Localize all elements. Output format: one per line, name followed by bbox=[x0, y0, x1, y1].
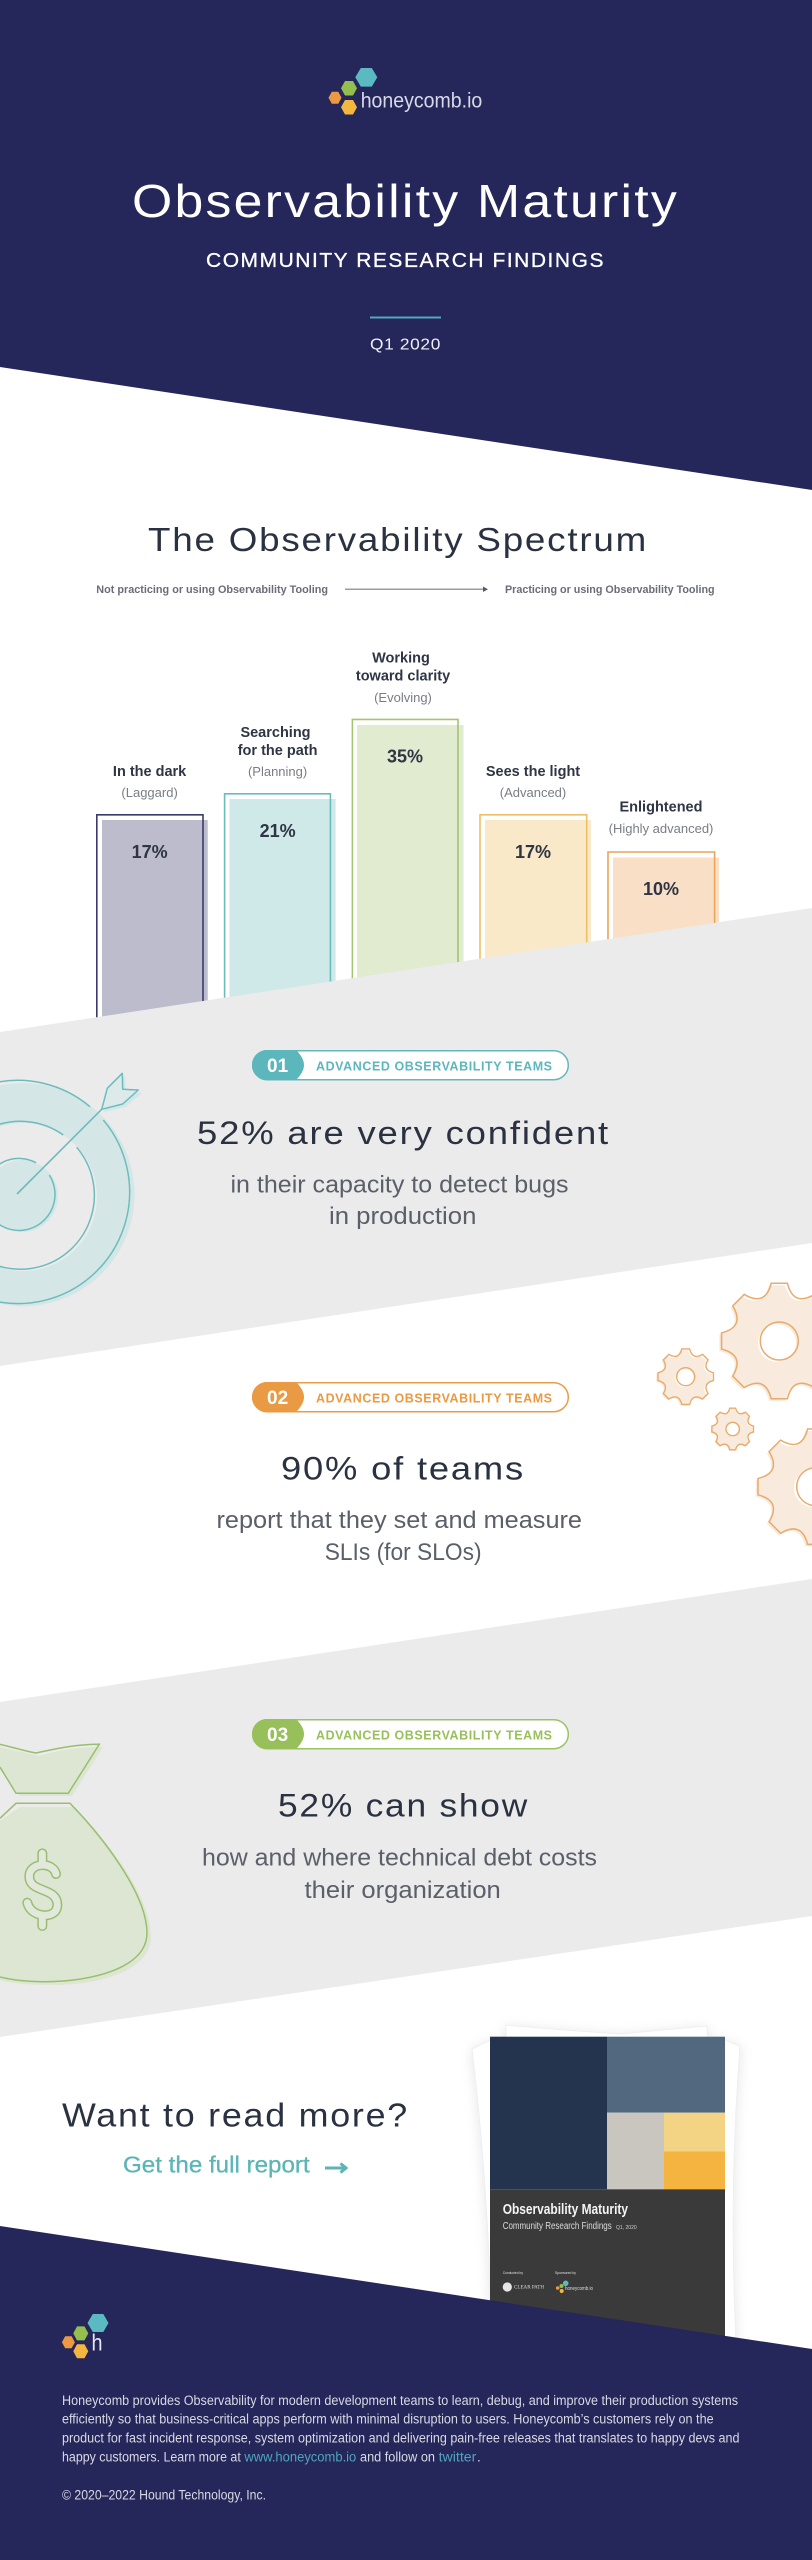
report cover bbox=[472, 2025, 740, 2360]
finding 02 pill badge bbox=[252, 1382, 568, 1412]
finding 03 heading: 52% can show bbox=[278, 1788, 529, 1824]
subtitle: COMMUNITY RESEARCH FINDINGS bbox=[206, 249, 605, 272]
bar: enlightened 10%: (Highly advanced) bbox=[609, 821, 713, 836]
footer logo: h bbox=[92, 2330, 102, 2356]
finding 03 pill badge: 03 bbox=[267, 1725, 288, 1746]
report cover: Community Research Findings bbox=[503, 2221, 612, 2232]
report cover: Q1, 2020 bbox=[616, 2225, 637, 2231]
panel: footer background bbox=[0, 2226, 812, 2560]
bar: enlightened 10%: 10% bbox=[643, 879, 679, 899]
bar: in the dark 17%: 17% bbox=[132, 842, 168, 862]
footer description: efficiently so that business-critical apps perform with minimal disruption to users. Honeycomb’s customers rely on the bbox=[62, 2412, 714, 2427]
footer description: . bbox=[477, 2450, 481, 2464]
finding 02 text: SLIs (for SLOs) bbox=[325, 1539, 482, 1566]
large gear bottom bbox=[756, 1429, 812, 1546]
panel: finding 03 background bbox=[0, 1579, 812, 2037]
bar: working toward clarity 35%: (Evolving) bbox=[374, 690, 432, 705]
footer description: twitter bbox=[439, 2450, 477, 2464]
finding 02 heading: 90% of teams bbox=[281, 1450, 525, 1486]
finding 01 text: in their capacity to detect bugs bbox=[230, 1172, 568, 1199]
cover text: Observability Maturity bbox=[503, 2202, 628, 2218]
small honeycomb logo: honeycomb.io bbox=[565, 2286, 593, 2292]
footer description: happy customers. Learn more at bbox=[62, 2450, 241, 2464]
date rule bbox=[370, 316, 441, 318]
spectrum legend: Practicing or using Observability Tooling bbox=[505, 584, 715, 596]
spectrum legend: Not practicing or using Observability Tooling bbox=[96, 584, 328, 596]
bar: sees the light 17%: (Advanced) bbox=[500, 785, 566, 800]
bar: enlightened 10%: Enlightened bbox=[620, 800, 702, 816]
finding 01 pill badge: ADVANCED OBSERVABILITY TEAMS bbox=[316, 1060, 553, 1074]
large gear top bbox=[719, 1283, 812, 1401]
bar: sees the light 17%: 17% bbox=[515, 842, 551, 862]
title: Observability Maturity bbox=[132, 175, 679, 227]
bar: working toward clarity 35%: 35% bbox=[387, 746, 423, 766]
bar: in the dark 17%: (Laggard) bbox=[121, 785, 178, 800]
header logo: honeycomb.io bbox=[361, 89, 482, 112]
report cover: Sponsored by bbox=[555, 2271, 576, 2275]
finding 02 pill badge: ADVANCED OBSERVABILITY TEAMS bbox=[316, 1392, 553, 1406]
small honeycomb logo bbox=[556, 2280, 593, 2293]
footer description: Honeycomb provides Observability for modern development teams to learn, debug, and improve their production systems bbox=[62, 2393, 738, 2408]
spectrum heading: The Observability Spectrum bbox=[148, 521, 648, 558]
bar: working toward clarity 35%: Working bbox=[372, 650, 430, 666]
panel: finding 01 background bbox=[0, 908, 812, 1366]
finding 02 text: report that they set and measure bbox=[216, 1507, 582, 1534]
bar: working toward clarity 35%: toward clarity bbox=[356, 668, 450, 684]
bar: sees the light 17% bbox=[480, 764, 591, 1020]
bar: enlightened 10% bbox=[608, 800, 719, 1008]
bar: sees the light 17%: Sees the light bbox=[486, 764, 580, 780]
finding 03 text bbox=[202, 1845, 597, 1904]
date: Q1 2020 bbox=[370, 336, 441, 354]
finding 01 pill badge bbox=[252, 1050, 568, 1080]
finding 01 text: in production bbox=[329, 1203, 476, 1230]
icon: gears bbox=[656, 1283, 812, 1546]
spectrum legend bbox=[96, 584, 715, 596]
panel: header background bbox=[0, 0, 812, 490]
bar: searching for the path 21%: 21% bbox=[260, 821, 296, 841]
finding 01 pill badge: 01 bbox=[267, 1056, 289, 1077]
bar: searching for the path 21% bbox=[225, 725, 336, 1040]
footer description: product for fast incident response, system optimization and delivering pain-free releases that translates to happy devs and bbox=[62, 2430, 740, 2446]
footer description bbox=[62, 2393, 740, 2464]
small gear middle bbox=[711, 1408, 753, 1451]
report cover: Conducted by bbox=[503, 2271, 523, 2275]
bar: in the dark 17% bbox=[97, 764, 208, 1050]
bar: in the dark 17%: In the dark bbox=[113, 764, 187, 780]
footer logo bbox=[62, 2314, 108, 2358]
icon: target and arrow bbox=[0, 1073, 142, 1306]
bar: searching for the path 21%: Searching bbox=[240, 725, 311, 741]
arrow bbox=[325, 2164, 346, 2172]
bar chart bbox=[97, 650, 719, 1050]
bar: searching for the path 21%: for the path bbox=[238, 743, 317, 759]
finding 01 text bbox=[230, 1172, 568, 1230]
finding 03 pill badge bbox=[252, 1719, 568, 1749]
clearpath logo bbox=[503, 2282, 544, 2292]
clearpath logo: CLEAR PATH bbox=[514, 2286, 544, 2291]
footer description: and follow on bbox=[360, 2450, 435, 2464]
finding 03 text: how and where technical debt costs bbox=[202, 1845, 597, 1872]
finding 02 text bbox=[216, 1507, 582, 1566]
bar: working toward clarity 35% bbox=[352, 650, 464, 1030]
cover art bbox=[490, 2037, 607, 2189]
finding 01 heading: 52% are very confident bbox=[197, 1115, 610, 1151]
finding 03 pill badge: ADVANCED OBSERVABILITY TEAMS bbox=[316, 1729, 553, 1743]
finding 02 pill badge: 02 bbox=[267, 1388, 288, 1409]
icon: money bag bbox=[0, 1744, 151, 1985]
small gear left bbox=[656, 1349, 713, 1406]
copyright: © 2020–2022 Hound Technology, Inc. bbox=[62, 2487, 266, 2502]
back sheets bbox=[472, 2025, 740, 2360]
header logo bbox=[328, 68, 482, 114]
dollar sign bbox=[27, 1853, 57, 1926]
bar: searching for the path 21%: (Planning) bbox=[248, 764, 307, 779]
call to action link: Get the full report bbox=[123, 2152, 310, 2178]
footer description: www.honeycomb.io bbox=[243, 2450, 356, 2464]
finding 03 text: their organization bbox=[304, 1877, 501, 1904]
call to action heading: Want to read more? bbox=[62, 2097, 409, 2134]
